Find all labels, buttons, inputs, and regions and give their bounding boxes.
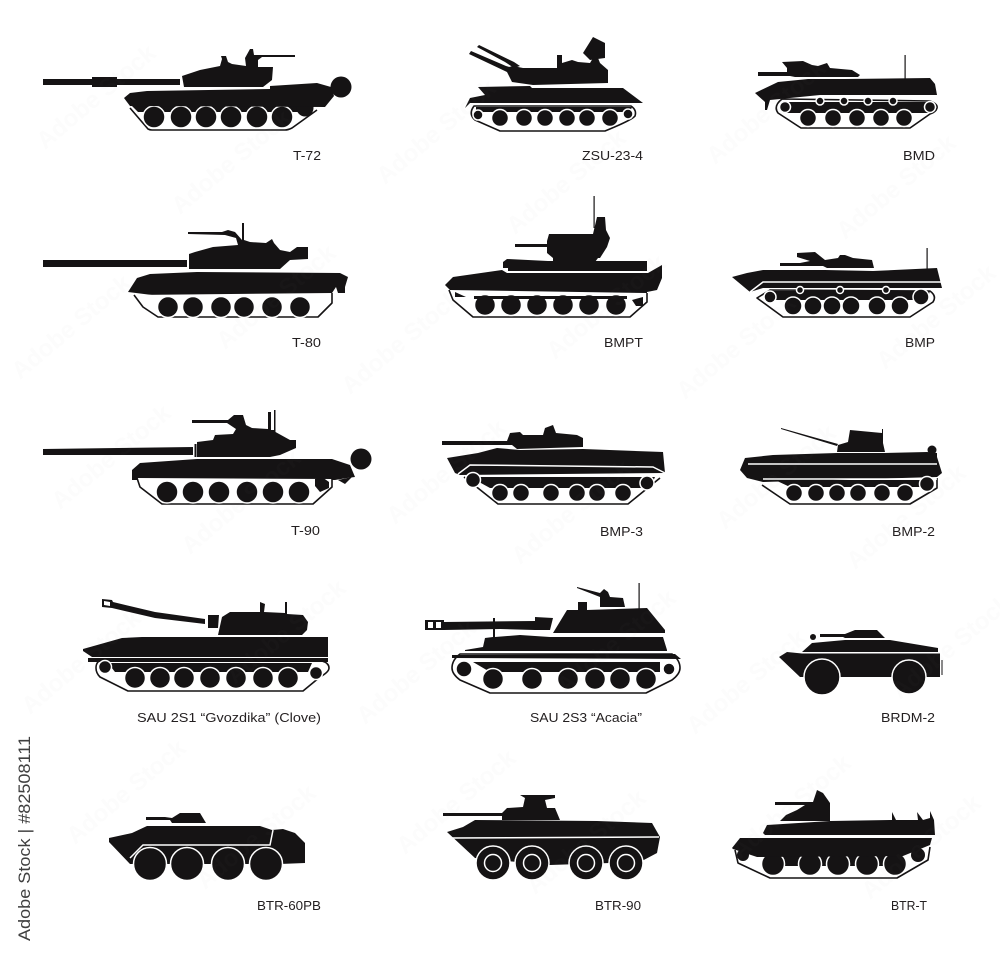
BTR-60PB label: BTR-60PB <box>257 898 321 913</box>
BTR-60PB hull <box>109 826 305 864</box>
BMP-3 turret and gun <box>442 425 583 449</box>
BMP track and wheels <box>757 286 934 317</box>
T-72 gun barrel <box>43 77 180 87</box>
vehicle: BTR-T <box>732 790 935 913</box>
BRDM-2 turret and gun <box>820 630 885 638</box>
vehicle: T-80 <box>43 223 348 350</box>
BRDM-2 bumper <box>941 660 943 675</box>
T-80 turret <box>188 223 308 269</box>
BRDM-2 lower hull <box>779 652 940 677</box>
watermarks: Adobe Stock <box>352 614 482 730</box>
watermarks: Adobe Stock <box>177 444 307 560</box>
BMP-2 turret <box>837 429 885 452</box>
BTR-T label: BTR-T <box>891 898 927 913</box>
BMPT track and wheels <box>449 290 647 317</box>
BTR-90 hull <box>447 820 660 865</box>
vehicle: ZSU-23-4 <box>465 37 643 163</box>
stock side credit: Adobe Stock | #82508111 <box>15 736 34 941</box>
BRDM-2 wheels <box>804 659 926 695</box>
BMD turret and gun <box>758 61 860 77</box>
BMD track and wheels <box>776 97 937 128</box>
watermarks: Adobe Stock <box>47 399 177 515</box>
BMP label: BMP <box>905 335 935 350</box>
2S1 howitzer barrel <box>102 599 205 624</box>
vehicle: BRDM-2 <box>779 630 942 725</box>
BTR-90 hull line <box>452 837 659 838</box>
T-90 fuel drum <box>350 448 372 470</box>
T-90 gun barrel <box>43 447 193 455</box>
watermarks: Adobe Stock <box>682 624 812 740</box>
BTR-60PB hull line <box>130 830 273 858</box>
watermarks: Adobe Stock <box>222 574 352 690</box>
watermarks: Adobe Stock <box>167 104 297 220</box>
BMP hull lines <box>750 282 942 292</box>
vehicle: BMP-2 <box>740 428 942 539</box>
watermarks: Adobe Stock <box>672 289 802 405</box>
BTR-T upper hull <box>763 811 935 835</box>
BMP-2 track and wheels <box>762 476 937 504</box>
watermarks: Adobe Stock <box>32 39 162 155</box>
watermarks: Adobe Stock <box>17 604 147 720</box>
watermarks: Adobe Stock <box>857 789 987 905</box>
T-72 track and wheels <box>130 100 317 130</box>
vehicle: BMD <box>755 55 937 163</box>
BTR-60PB turret and gun <box>146 813 206 823</box>
watermarks: Adobe Stock <box>842 459 972 575</box>
T-80 track and wheels <box>134 293 332 318</box>
T-80 gun barrel <box>43 260 187 267</box>
vehicle: SAU 2S1 Gvozdika <box>83 599 329 725</box>
vehicle: BTR-90 <box>443 795 660 913</box>
ZSU-23-4 label: ZSU-23-4 <box>582 148 643 163</box>
T-72 label: T-72 <box>293 148 321 163</box>
watermarks: Adobe Stock <box>507 454 637 570</box>
T-72 hull <box>124 83 334 107</box>
watermarks: Adobe Stock <box>552 584 682 700</box>
watermarks: Adobe Stock <box>212 239 342 355</box>
vehicle: BMPT <box>445 196 662 350</box>
2S1 track and wheels <box>88 658 329 691</box>
BTR-90 turret and gun <box>443 795 560 820</box>
ZSU-23-4 turret <box>505 55 608 85</box>
BRDM-2 periscope ball <box>810 634 816 640</box>
BMP-2 dome <box>928 446 936 454</box>
vehicle: BMP <box>732 248 942 350</box>
watermarks: Adobe Stock <box>372 74 502 190</box>
BTR-T lower hull <box>732 838 932 857</box>
BMP hull <box>732 268 942 292</box>
watermarks: Adobe Stock <box>337 284 467 400</box>
2S1 label: SAU 2S1 “Gvozdika” (Clove) <box>137 710 321 725</box>
T-90 label: T-90 <box>291 523 320 538</box>
BMP-3 label: BMP-3 <box>600 524 643 539</box>
watermarks: Adobe Stock <box>382 414 512 530</box>
ZSU-23-4 hull <box>465 86 643 108</box>
vehicle: BTR-60PB <box>109 813 321 913</box>
2S3 turret <box>553 602 665 633</box>
watermarks: Adobe Stock <box>832 129 962 245</box>
watermarks: Adobe Stock <box>702 54 832 170</box>
2S3 upper hull <box>465 618 667 651</box>
BMP turret and gun <box>780 252 874 268</box>
2S1 hull <box>83 637 328 657</box>
ZSU-23-4 twin cannons <box>469 45 520 74</box>
T-72 turret <box>182 49 295 87</box>
T-90 mantlet <box>194 444 196 457</box>
2S1 turret <box>218 602 308 635</box>
T-90 turret <box>192 410 296 457</box>
BTR-90 label: BTR-90 <box>595 898 641 913</box>
watermarks: Adobe Stock <box>872 259 1000 375</box>
2S3 label: SAU 2S3 “Acacia” <box>530 710 642 725</box>
2S3 antenna <box>638 583 640 609</box>
watermarks: Adobe Stock <box>392 744 522 860</box>
watermarks: Adobe Stock <box>727 749 857 865</box>
BMP-3 hull <box>447 448 665 475</box>
T-72 fuel drum <box>330 76 352 98</box>
BTR-T turret and gun <box>775 790 830 821</box>
BMPT weapon module <box>515 217 610 262</box>
BMD antenna <box>904 55 906 79</box>
watermarks: Adobe Stock <box>62 734 192 850</box>
BRDM-2 label: BRDM-2 <box>881 710 935 725</box>
BMP-3 hull line <box>458 465 665 474</box>
BMPT antenna <box>594 196 595 228</box>
BMP-2 hull line <box>748 463 937 465</box>
BMP-3 track and wheels <box>464 472 660 504</box>
2S3 gun barrel <box>425 617 553 630</box>
BTR-T track and wheels <box>735 847 930 878</box>
T-90 track and wheels <box>137 477 352 504</box>
BMD hull <box>755 78 937 110</box>
T-80 label: T-80 <box>292 335 321 350</box>
BMPT upper deck <box>503 259 647 271</box>
T-90 hull <box>132 459 355 480</box>
vehicle: SAU 2S3 Acacia <box>425 583 681 725</box>
BMP-2 gun <box>781 428 838 446</box>
ZSU-23-4 track and wheels <box>471 106 636 131</box>
2S3 track and wheels <box>452 654 681 693</box>
2S1 mantlet <box>208 615 219 628</box>
watermarks: Adobe Stock <box>7 269 137 385</box>
watermarks: Adobe Stock <box>502 124 632 240</box>
watermarks: Adobe Stock <box>542 249 672 365</box>
vehicle: T-72 <box>43 49 352 163</box>
watermarks: Adobe Stock <box>712 419 842 535</box>
BTR-60PB wheels <box>134 848 282 880</box>
BRDM-2 upper hull <box>802 640 938 652</box>
BMD label: BMD <box>903 148 935 163</box>
BMPT hull <box>445 265 662 298</box>
ZSU-23-4 radar dish <box>583 37 605 60</box>
2S3 cupola <box>577 587 625 607</box>
watermarks: Adobe Stock <box>522 784 652 900</box>
vehicle: BMP-3 <box>442 425 665 539</box>
BMP-2 label: BMP-2 <box>892 524 935 539</box>
BMP antenna <box>926 248 928 269</box>
BMP-2 hull <box>740 452 942 482</box>
BTR-90 wheels <box>476 846 643 880</box>
vehicle: T-90 <box>43 410 372 538</box>
BMPT label: BMPT <box>604 335 643 350</box>
watermarks: Adobe Stock <box>192 779 322 895</box>
T-80 hull <box>128 272 348 296</box>
